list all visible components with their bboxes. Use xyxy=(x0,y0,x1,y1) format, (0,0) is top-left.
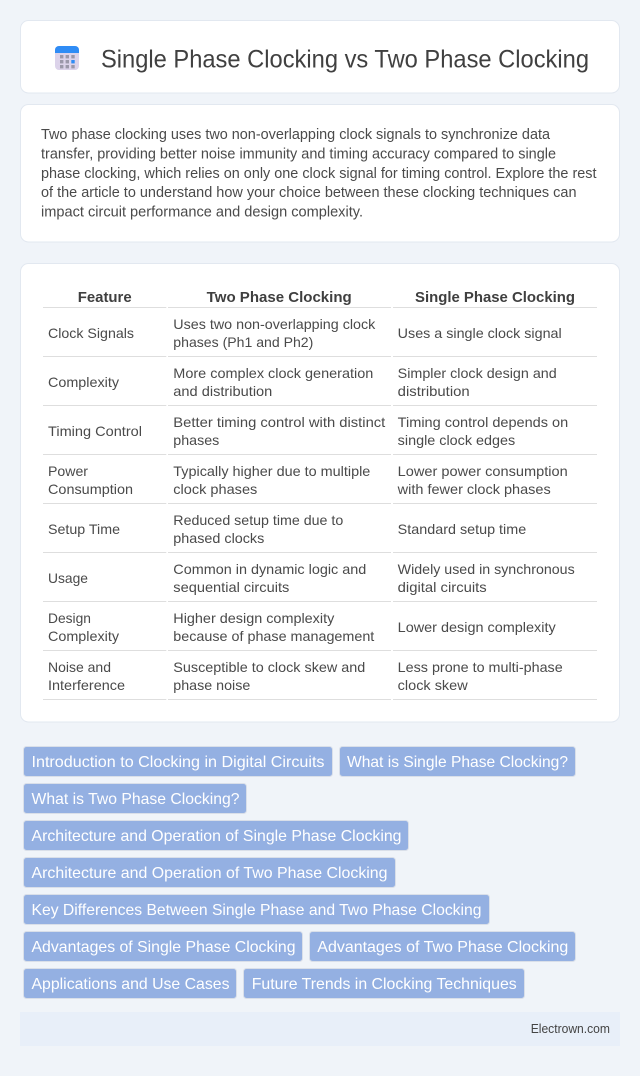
row: usage: Usage xyxy=(48,570,88,586)
row: timing control xyxy=(48,414,568,448)
row: power consumption: Typically higher due to multiple xyxy=(173,463,371,479)
footer: Electrown.com xyxy=(531,1022,610,1036)
footer xyxy=(20,1012,620,1046)
row: design complexity: Higher design complexity xyxy=(173,610,334,626)
row: timing control: Better timing control with distinct xyxy=(173,414,385,430)
tag: advantages two phase xyxy=(310,932,576,962)
row: design complexity: Complexity xyxy=(48,628,119,644)
row: noise and interference: Interference xyxy=(48,677,125,693)
row: complexity: Simpler clock design and xyxy=(398,365,557,381)
row: clock signals: Uses a single clock signal xyxy=(398,325,562,341)
tag: what is single phase xyxy=(340,746,576,776)
row: noise and interference: phase noise xyxy=(173,677,251,693)
icon: calendar grid xyxy=(55,46,79,70)
row: complexity: More complex clock generation xyxy=(173,365,373,381)
panel: comparison table xyxy=(20,264,620,722)
text block: introduction: Two phase clocking uses two non-overlapping clock signals to synchronize data xyxy=(41,127,550,143)
row: clock signals: Uses two non-overlapping clock xyxy=(173,316,376,332)
row: timing control: phases xyxy=(173,432,219,448)
row: setup time xyxy=(48,512,526,546)
tag: what is two phase: What is Two Phase Clocking? xyxy=(32,791,240,808)
panel: topic tags xyxy=(24,746,576,998)
tag: key differences xyxy=(24,894,490,924)
text block: introduction xyxy=(41,127,596,220)
panel: description xyxy=(20,104,620,242)
row: setup time: Setup Time xyxy=(48,521,120,537)
row: complexity xyxy=(48,365,557,399)
tag: advantages single phase: Advantages of Single Phase Clocking xyxy=(32,939,296,956)
row: noise and interference: clock skew xyxy=(398,677,469,693)
row: noise and interference: Susceptible to clock skew and xyxy=(173,659,365,675)
row: power consumption: Lower power consumption xyxy=(398,463,568,479)
row: power consumption: Power xyxy=(48,463,88,479)
row: usage: sequential circuits xyxy=(173,579,289,595)
row: noise and interference xyxy=(48,659,563,693)
tag: future trends xyxy=(244,968,524,998)
row: complexity: and distribution xyxy=(173,383,272,399)
tag: future trends: Future Trends in Clocking Techniques xyxy=(252,976,517,993)
row: design complexity: Design xyxy=(48,610,91,626)
table header row: Two Phase Clocking xyxy=(207,289,352,306)
panel: header xyxy=(20,20,620,93)
row: setup time: Reduced setup time due to xyxy=(173,512,344,528)
tag: architecture two phase: Architecture and Operation of Two Phase Clocking xyxy=(32,865,388,882)
tag: applications xyxy=(24,968,236,998)
row: power consumption xyxy=(48,463,568,497)
row: usage: Common in dynamic logic and xyxy=(173,561,366,577)
row: design complexity: Lower design complexity xyxy=(398,619,556,635)
row: clock signals xyxy=(48,316,562,350)
row: power consumption: clock phases xyxy=(173,481,257,497)
tag: introduction: Introduction to Clocking in Digital Circuits xyxy=(32,754,324,771)
table header row: Feature xyxy=(78,289,132,306)
row: setup time: phased clocks xyxy=(173,530,264,546)
row: complexity: Complexity xyxy=(48,374,119,390)
tag: architecture single phase xyxy=(24,820,408,850)
text block: introduction: phase clocking, which relies on only one clock signal for timing control. Explore the rest xyxy=(41,166,596,182)
tag: architecture single phase: Architecture and Operation of Single Phase Clocking xyxy=(32,828,402,845)
row: timing control: single clock edges xyxy=(398,432,515,448)
row: clock signals: phases (Ph1 and Ph2) xyxy=(173,334,313,350)
row: design complexity: because of phase management xyxy=(173,628,374,644)
text block: introduction: transfer, providing better noise immunity and timing accuracy compared to single xyxy=(41,146,556,162)
text block: introduction: impact circuit performance and design complexity. xyxy=(41,204,363,220)
tag: advantages two phase: Advantages of Two Phase Clocking xyxy=(317,939,568,956)
row: design complexity xyxy=(48,610,556,644)
tag: what is two phase xyxy=(24,784,246,814)
tag: introduction xyxy=(24,746,332,776)
tag: advantages single phase xyxy=(24,932,302,962)
tag: key differences: Key Differences Between Single Phase and Two Phase Clocking xyxy=(32,902,482,919)
tag: applications: Applications and Use Cases xyxy=(32,976,230,993)
row: power consumption: Consumption xyxy=(48,481,133,497)
row: power consumption: with fewer clock phases xyxy=(397,481,551,497)
title: Single Phase Clocking vs Two Phase Clocking xyxy=(101,46,589,74)
tag: what is single phase: What is Single Phase Clocking? xyxy=(347,754,568,771)
row: timing control: Timing control depends on xyxy=(398,414,568,430)
row: usage: digital circuits xyxy=(398,579,487,595)
table header row: Single Phase Clocking xyxy=(415,289,575,306)
row: setup time: Standard setup time xyxy=(398,521,526,537)
tag: architecture two phase xyxy=(24,858,396,888)
row: complexity: distribution xyxy=(398,383,470,399)
row: usage xyxy=(48,561,575,595)
row: noise and interference: Less prone to multi-phase xyxy=(398,659,563,675)
row: noise and interference: Noise and xyxy=(48,659,111,675)
text block: introduction: of the article to understand how your choice between these clocking techniques can xyxy=(41,185,576,201)
row: usage: Widely used in synchronous xyxy=(398,561,575,577)
row: clock signals: Clock Signals xyxy=(48,325,134,341)
table header row xyxy=(78,289,575,306)
row: timing control: Timing Control xyxy=(48,423,142,439)
